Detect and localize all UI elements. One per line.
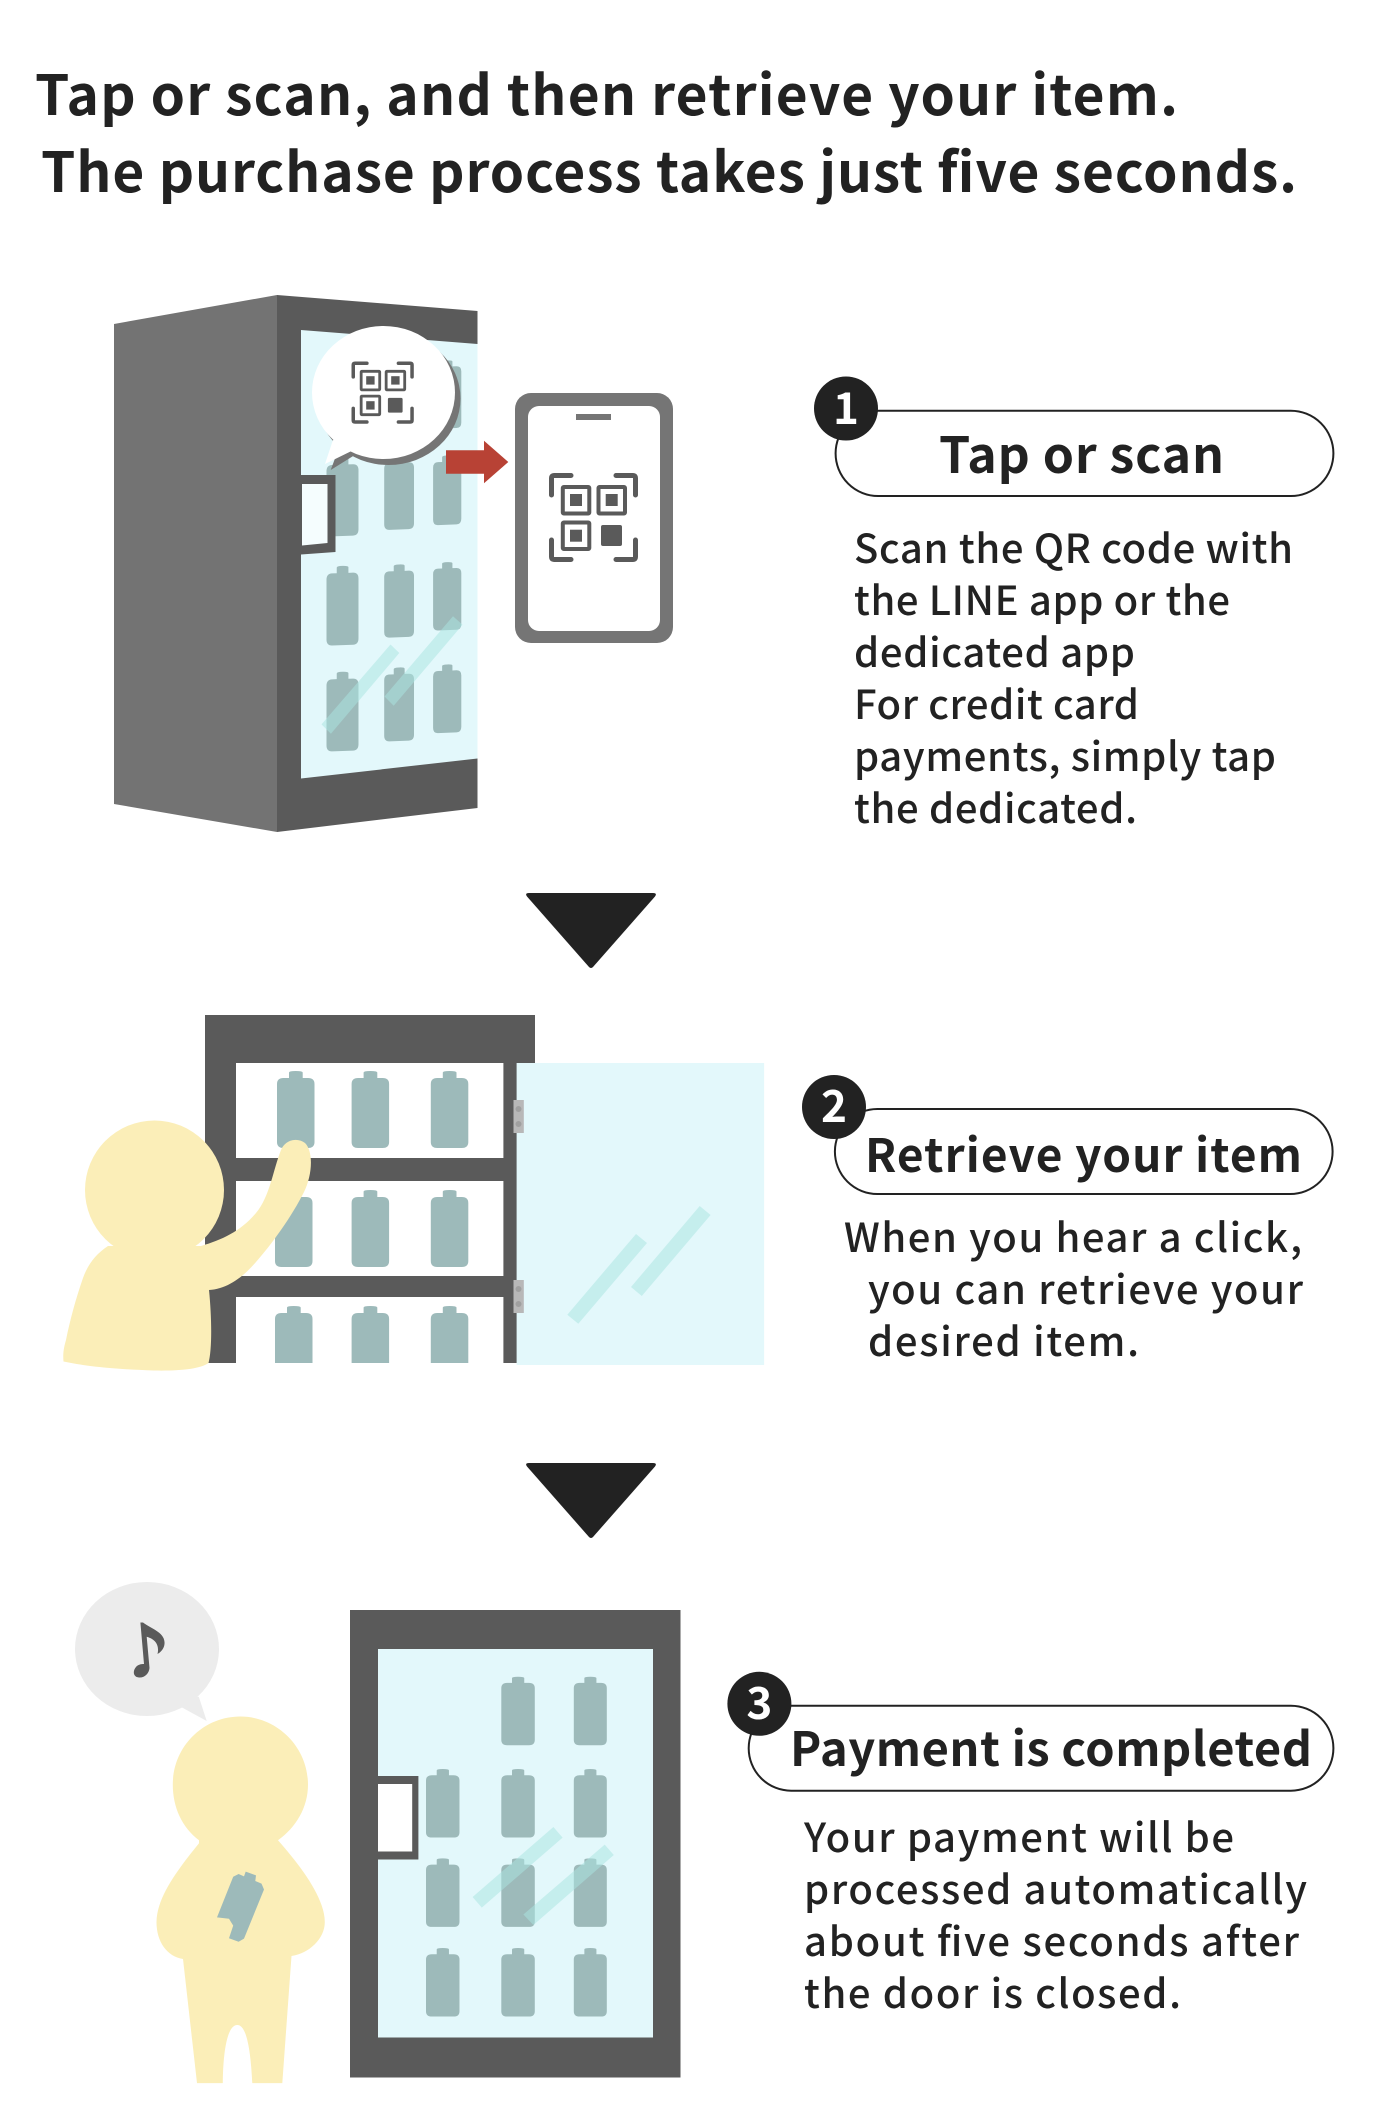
panel: step 1 tap or scan xyxy=(114,295,1333,835)
step 3 description: the door is closed. xyxy=(804,1962,1181,2020)
person holding item xyxy=(156,1717,325,2083)
step 3 description xyxy=(803,1806,1307,2020)
arrow: down triangle 1 xyxy=(526,893,656,968)
step 2 description: When you hear a click, xyxy=(844,1206,1302,1264)
door hinges xyxy=(514,1100,524,1313)
step 1 heading pill xyxy=(814,373,1333,496)
step 2 description: desired item. xyxy=(868,1310,1139,1368)
panel: step 3 payment is completed xyxy=(75,1582,1333,2083)
icon: music note xyxy=(134,1622,165,1678)
step 1 description: For credit card xyxy=(854,673,1139,731)
step 1 description: dedicated app xyxy=(854,621,1135,679)
illustration: vending fridge side view xyxy=(114,295,478,832)
step 1 description: Scan the QR code with xyxy=(854,517,1293,575)
step 3 heading pill: 3 xyxy=(746,1668,772,1732)
step 2 description xyxy=(844,1206,1304,1368)
step 2 heading pill: Retrieve your item xyxy=(865,1120,1302,1186)
step 2 heading pill xyxy=(802,1071,1333,1194)
step 3 description: processed automatically xyxy=(804,1858,1307,1916)
step 2 heading pill: 2 xyxy=(821,1071,847,1135)
illustration: closed fridge xyxy=(350,1610,680,2078)
open glass door xyxy=(517,1063,764,1365)
panel: step 2 retrieve your item xyxy=(63,1015,1333,1371)
title: Tap or scan, and then retrieve your item. xyxy=(35,51,1178,131)
step 1 description xyxy=(854,517,1293,835)
step 2 description: you can retrieve your xyxy=(868,1258,1304,1316)
item held in hands xyxy=(217,1872,264,1942)
step 1 description: the dedicated. xyxy=(854,777,1137,835)
step 3 description: about five seconds after xyxy=(804,1910,1300,1968)
icon: smartphone with QR code xyxy=(515,393,673,643)
speech bubble with music note xyxy=(75,1582,219,1721)
title: The purchase process takes just five seconds. xyxy=(41,128,1297,208)
step 3 heading pill: Payment is completed xyxy=(790,1711,1312,1780)
speech bubble with QR code xyxy=(312,326,460,470)
step 1 description: payments, simply tap xyxy=(854,725,1276,783)
title xyxy=(35,51,1297,208)
step 1 description: the LINE app or the xyxy=(854,569,1230,627)
step 3 heading pill xyxy=(727,1668,1333,1791)
arrow: down triangle 2 xyxy=(526,1463,656,1538)
arrow: red xyxy=(446,441,508,483)
step 1 heading pill: Tap or scan xyxy=(939,416,1224,488)
step 1 heading pill: 1 xyxy=(833,373,859,437)
illustration: open fridge xyxy=(205,1015,535,1363)
person reaching for item xyxy=(63,1120,311,1371)
step 3 description: Your payment will be xyxy=(803,1806,1234,1864)
